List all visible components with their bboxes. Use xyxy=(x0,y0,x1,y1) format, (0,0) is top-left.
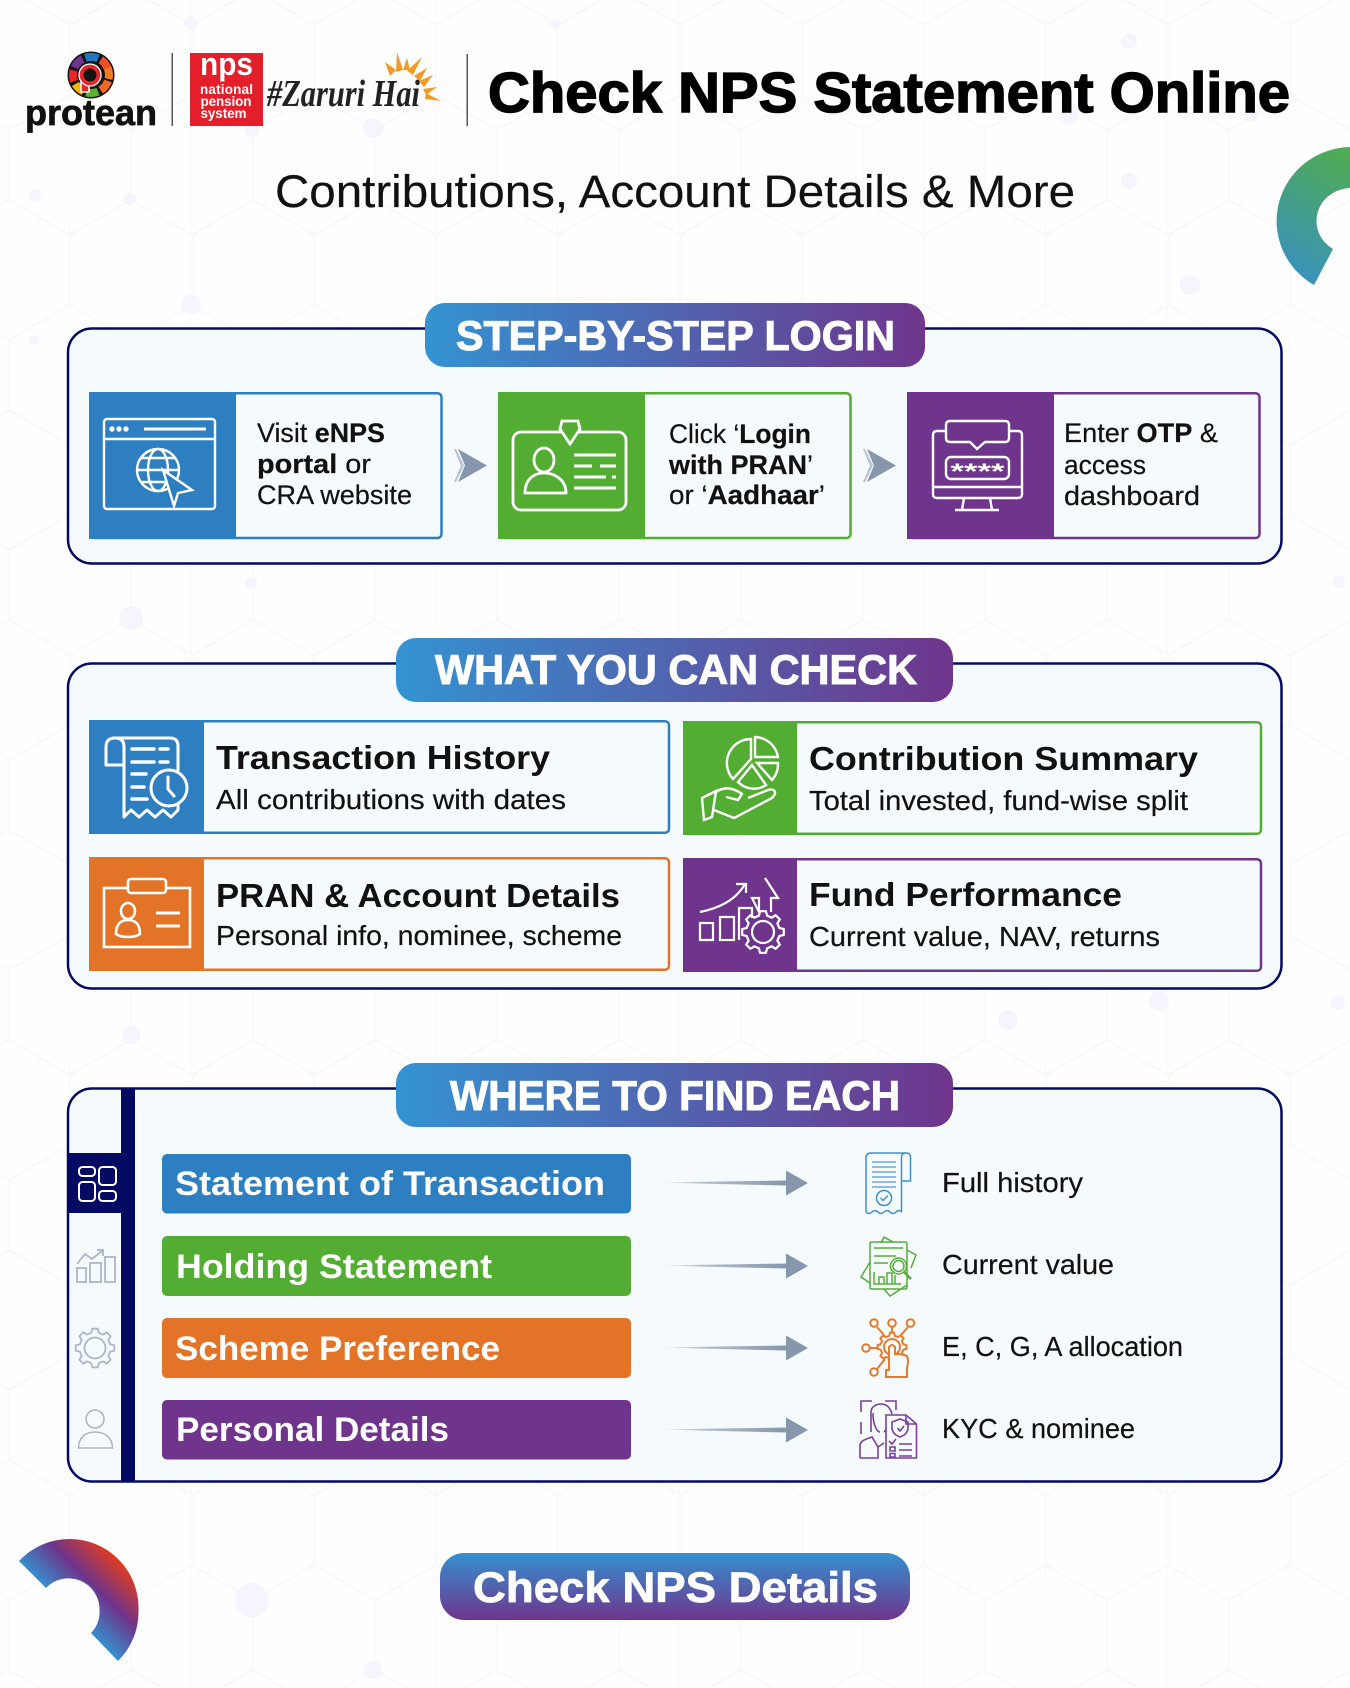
step 1 text: Visit eNPS xyxy=(257,418,385,448)
logo: nps: pension xyxy=(200,94,252,109)
icon: growth with gear xyxy=(700,878,784,953)
icon: pie chart on hand xyxy=(702,737,778,820)
logo: zaruri hai: #Zaruri Hai xyxy=(266,73,420,115)
icon: kyc document xyxy=(860,1401,916,1458)
heading: where to find each xyxy=(396,1063,953,1127)
card: pran and account details: Personal info, nominee, scheme xyxy=(216,920,622,951)
heading: step-by-step login xyxy=(425,303,925,367)
step 2 text: or ‘Aadhaar’ xyxy=(669,480,825,510)
icon: clipboard profile xyxy=(104,879,190,947)
icon: id card xyxy=(513,421,626,510)
heading: what you can check: WHAT YOU CAN CHECK xyxy=(435,646,917,693)
sidebar xyxy=(68,1088,135,1482)
logo: nps xyxy=(190,46,263,126)
heading: step-by-step login: STEP-BY-STEP LOGIN xyxy=(456,312,895,359)
panel: step-by-step login xyxy=(68,303,1282,564)
icon: browser with globe xyxy=(104,419,215,509)
step 3 text: dashboard xyxy=(1064,481,1200,511)
text: allocation: E, C, G, A allocation xyxy=(942,1331,1183,1362)
step 3 card xyxy=(907,392,1260,539)
arrow xyxy=(656,1336,808,1360)
row: scheme preference: Scheme Preference xyxy=(175,1330,500,1368)
panel: what you can check xyxy=(68,638,1282,988)
title: Check NPS Statement Online xyxy=(488,61,1290,125)
icon: monitor with otp: **** xyxy=(950,459,1005,484)
arrow: step 2 to 3 xyxy=(863,449,896,482)
text: fund performance: Fund Performance xyxy=(809,877,1122,914)
icon: document xyxy=(866,1153,910,1214)
icon: user xyxy=(78,1410,112,1448)
step 3 text: Enter OTP & xyxy=(1064,418,1218,448)
icon: gear xyxy=(76,1329,114,1367)
row: statement of transaction xyxy=(162,1154,631,1214)
call to action button xyxy=(440,1553,910,1620)
icon: receipt with clock xyxy=(106,738,187,817)
logo: nps: system xyxy=(200,106,246,121)
step 2 card xyxy=(498,392,850,539)
row: personal details xyxy=(162,1400,631,1460)
step 2 text xyxy=(668,419,825,510)
card: pran and account details xyxy=(89,857,669,971)
step 1 text xyxy=(257,418,412,510)
text: transaction history: Transaction History xyxy=(216,740,550,777)
arrow xyxy=(656,1418,808,1442)
card: fund performance xyxy=(683,858,1261,972)
icon: dashboard tiles xyxy=(79,1167,116,1201)
card: fund performance: Current value, NAV, returns xyxy=(809,921,1160,952)
step 3 text: access xyxy=(1064,450,1146,480)
header logos xyxy=(25,46,468,133)
call to action button: Check NPS Details xyxy=(473,1564,878,1612)
logo: protean xyxy=(25,52,157,133)
text: contribution summary: Contribution Summary xyxy=(809,741,1198,778)
card: transaction history xyxy=(89,720,669,834)
step 2 text: Click ‘Login xyxy=(669,419,811,449)
logo: nps: nps xyxy=(200,46,253,82)
decorative arc: bottom left blue-purple-red xyxy=(19,1539,139,1661)
arrow xyxy=(656,1170,808,1196)
decorative arc: top right green-blue xyxy=(1277,147,1350,285)
logo: nps: national xyxy=(200,82,253,97)
card: contribution summary: Total invested, fund-wise split xyxy=(809,785,1188,816)
icon: report with magnifier xyxy=(861,1237,916,1296)
panel: where to find each xyxy=(68,1063,1282,1482)
row: holding statement xyxy=(162,1236,631,1296)
text: kyc and nominee: KYC & nominee xyxy=(942,1413,1135,1444)
text: full history: Full history xyxy=(942,1167,1083,1198)
icon: monitor with otp xyxy=(933,421,1022,510)
heading: where to find each: WHERE TO FIND EACH xyxy=(450,1072,900,1119)
icon: gear with hand xyxy=(862,1319,914,1377)
step 1 text: CRA website xyxy=(257,480,412,510)
arrow xyxy=(656,1254,808,1278)
card: contribution summary xyxy=(683,721,1261,835)
row: personal details: Personal Details xyxy=(176,1411,449,1449)
subtitle: Contributions, Account Details & More xyxy=(275,166,1075,217)
arrow: step 1 to 2 xyxy=(454,449,487,482)
logo: zaruri hai xyxy=(266,52,441,115)
step 1 text: portal or xyxy=(257,449,371,479)
row: statement of transaction: Statement of Transaction xyxy=(175,1165,605,1203)
step 1 card xyxy=(89,392,442,539)
card: transaction history: All contributions with dates xyxy=(216,784,566,815)
step 2 text: with PRAN’ xyxy=(668,450,813,480)
row: scheme preference xyxy=(162,1318,631,1378)
step 3 text xyxy=(1064,418,1218,511)
row: holding statement: Holding Statement xyxy=(176,1248,492,1286)
heading: what you can check xyxy=(396,638,953,702)
text: pran and account details: PRAN & Account Details xyxy=(216,878,620,915)
icon: growth chart xyxy=(77,1250,115,1282)
logo: protean: protean xyxy=(25,92,157,133)
text: current value: Current value xyxy=(942,1249,1114,1280)
